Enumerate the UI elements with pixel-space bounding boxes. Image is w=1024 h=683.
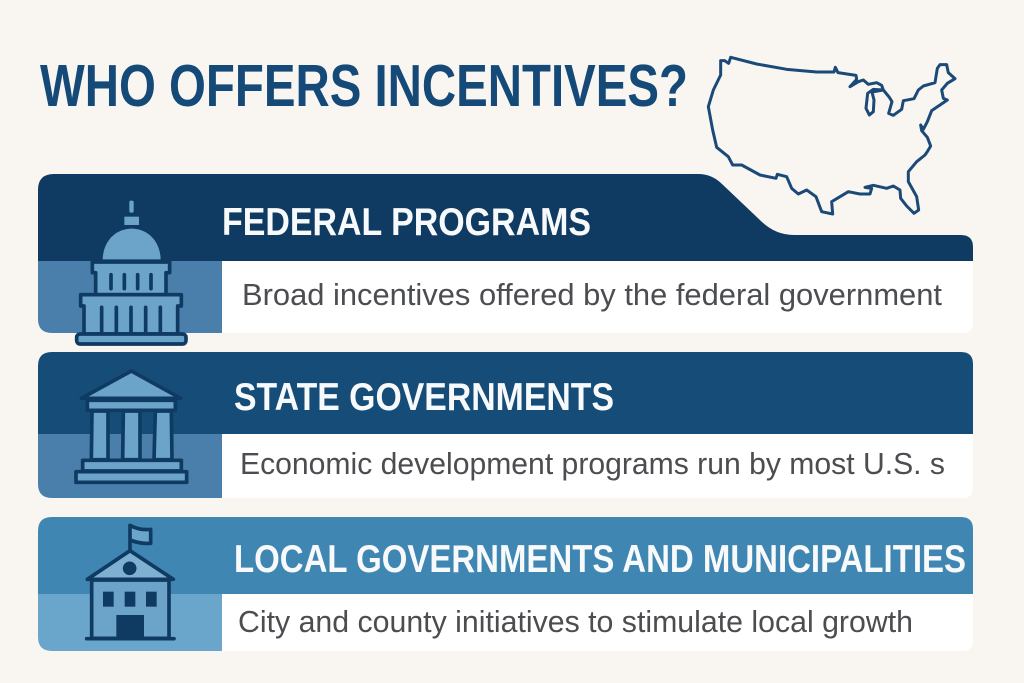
panel description: City and county initiatives to stimulate local growth (238, 604, 913, 639)
panel: local governments (38, 517, 973, 651)
icon: town hall (87, 525, 174, 639)
panel header background (38, 174, 973, 262)
panel lower left band (38, 434, 222, 498)
panel: federal programs (38, 174, 973, 344)
icon: state capitol columns (76, 371, 187, 482)
panel: state governments (38, 352, 973, 498)
panel description: Economic development programs run by most U.S. s (240, 446, 945, 481)
title: WHO OFFERS INCENTIVES? (40, 53, 688, 119)
panel lower left band (38, 261, 222, 333)
icon: capitol building (77, 201, 186, 344)
panel header background (38, 517, 973, 595)
description background (222, 261, 973, 333)
description background (222, 434, 973, 498)
panel header background (38, 352, 973, 435)
panel heading: STATE GOVERNMENTS (234, 376, 614, 419)
icon: US map outline (708, 57, 955, 214)
panel lower left band (38, 594, 222, 651)
panel description: Broad incentives offered by the federal government (242, 277, 942, 312)
description background (222, 594, 973, 651)
panel heading: FEDERAL PROGRAMS (222, 201, 591, 244)
